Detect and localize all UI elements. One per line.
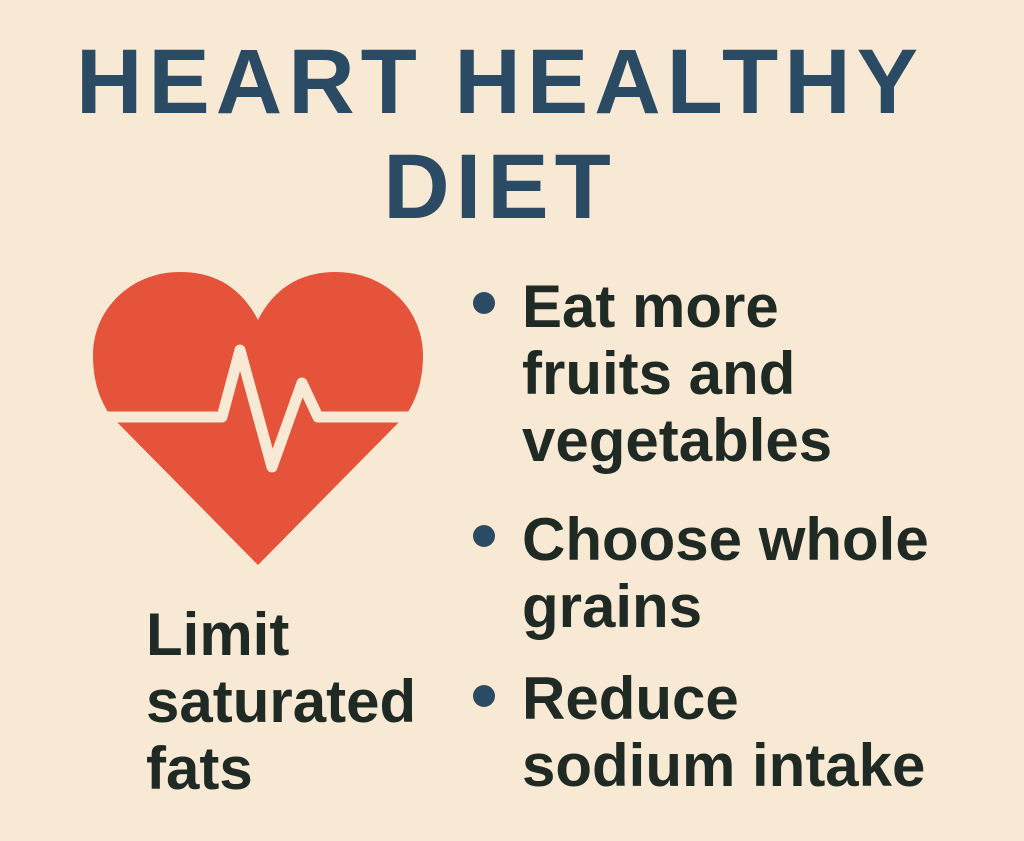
title: DIET (383, 136, 617, 238)
bullet 3 (473, 665, 925, 799)
bullet 1 (473, 273, 832, 474)
title (76, 31, 924, 238)
text: limit saturated fats: saturated (146, 668, 416, 735)
bullet list: sodium intake (522, 732, 925, 799)
text: limit saturated fats (146, 601, 416, 802)
bullet list: fruits and (522, 340, 795, 407)
bullet list: Eat more (522, 273, 779, 340)
title: HEART HEALTHY (76, 31, 924, 133)
bullet list: Reduce (522, 665, 739, 732)
bullet list: Choose whole (522, 506, 929, 573)
bullet list: vegetables (522, 407, 832, 474)
bullet 2 (473, 506, 929, 640)
text: limit saturated fats: fats (146, 735, 253, 802)
text: limit saturated fats: Limit (146, 601, 289, 668)
bullet list (473, 273, 929, 799)
bullet list: grains (522, 573, 702, 640)
